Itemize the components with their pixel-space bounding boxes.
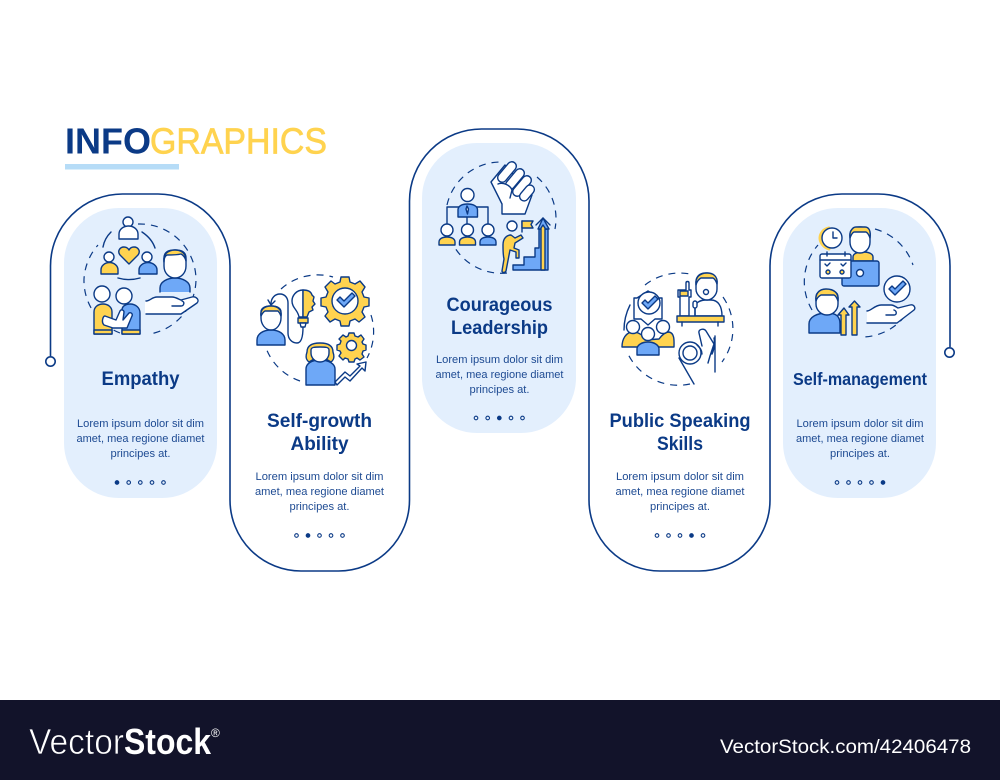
icon: empathy	[84, 217, 198, 334]
text block: Lorem ipsum dolor sit dim	[256, 471, 384, 483]
text block	[796, 418, 925, 460]
text block	[76, 418, 205, 460]
title	[65, 120, 327, 162]
heading: Skills	[657, 434, 703, 455]
heading	[267, 411, 372, 455]
heading	[610, 411, 750, 455]
panel: self-management	[783, 208, 936, 498]
pagination dots	[835, 481, 885, 484]
pagination dots	[474, 416, 524, 420]
panel: courageous leadership	[422, 143, 576, 433]
text block: amet, mea regione diamet	[616, 486, 745, 498]
panel: public speaking skills	[610, 273, 750, 537]
heading	[446, 295, 552, 339]
icon: self-growth	[257, 275, 374, 385]
text block: principes at.	[110, 448, 170, 460]
text block: Lorem ipsum dolor sit dim	[796, 418, 924, 430]
icon: public speaking	[622, 273, 733, 385]
pagination dots	[295, 534, 344, 537]
footer logo: ®	[211, 726, 220, 740]
text block: amet, mea regione diamet	[255, 486, 385, 498]
heading: Public Speaking	[610, 411, 750, 432]
text block: Lorem ipsum dolor sit dim	[436, 354, 563, 366]
footer logo: Stock	[124, 721, 212, 762]
footer image id: VectorStock.com/42406478	[720, 736, 971, 758]
heading: Ability	[290, 434, 349, 455]
text block	[436, 354, 564, 396]
footer logo: Vector	[29, 721, 124, 762]
text block	[616, 471, 745, 513]
pagination dots	[115, 481, 165, 484]
text block: principes at.	[830, 448, 890, 460]
panel: empathy	[64, 208, 217, 498]
heading: Leadership	[451, 318, 548, 339]
heading: Self-management	[793, 369, 927, 389]
title underline	[65, 164, 179, 170]
icon: courageous leadership	[439, 160, 556, 273]
text block: amet, mea regione diamet	[76, 433, 205, 445]
text block: principes at.	[650, 501, 710, 513]
heading: Self-growth	[267, 411, 372, 432]
title: GRAPHICS	[150, 120, 327, 162]
text block: Lorem ipsum dolor sit dim	[77, 418, 204, 430]
text block: principes at.	[470, 384, 530, 396]
icon: self-management	[804, 227, 915, 337]
text block	[255, 471, 385, 513]
text block: Lorem ipsum dolor sit dim	[616, 471, 744, 483]
pagination dots	[655, 534, 705, 537]
title: INFO	[65, 120, 151, 162]
text block: amet, mea regione diamet	[796, 433, 925, 445]
heading: Courageous	[446, 295, 552, 316]
footer bar	[0, 700, 1000, 780]
footer logo	[29, 721, 220, 762]
heading: Empathy	[102, 369, 180, 390]
text block: principes at.	[290, 501, 350, 513]
connecting outline frame	[46, 129, 954, 571]
panel: self-growth ability	[255, 275, 385, 537]
text block: amet, mea regione diamet	[436, 369, 564, 381]
